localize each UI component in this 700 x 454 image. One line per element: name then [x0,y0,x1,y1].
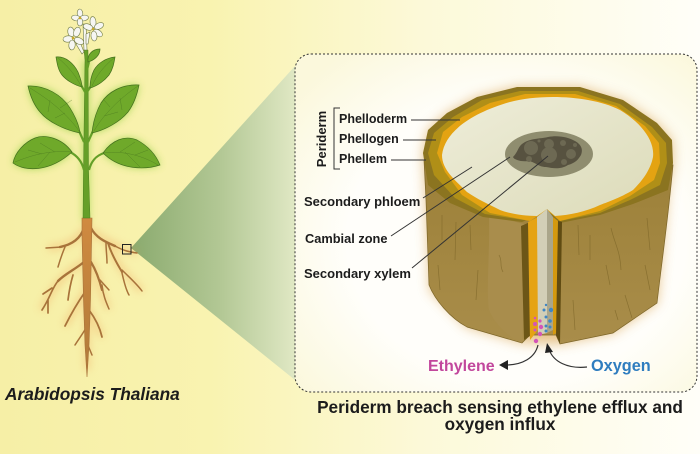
label: phellogen: Phellogen [339,132,399,146]
lateral roots [42,228,142,355]
bark body [424,160,673,344]
central core [505,131,593,177]
root glow [42,220,142,370]
ethylene dots [533,317,543,343]
section glow [423,87,673,344]
leaf veins [15,58,158,167]
label: secondary phloem [304,167,472,209]
left bark fold [488,215,528,343]
stem section [423,87,673,344]
leaf glow [13,60,160,220]
label: cambial zone: Cambial zone [305,231,388,246]
oxygen label: Oxygen [591,357,651,375]
stem [83,50,90,218]
label: secondary xylem [304,156,548,281]
label: phellogen [339,132,436,146]
periderm bracket [334,108,340,169]
label: phelloderm [339,112,460,126]
flowers [63,9,105,54]
arrow: oxygen in [545,343,587,367]
label: phellem [339,152,426,166]
label: secondary xylem: Secondary xylem [304,266,411,281]
caption line 2: oxygen influx [445,414,556,434]
top inner tissue [442,97,653,216]
periderm label: Periderm [314,111,329,167]
label: phellem: Phellem [339,152,387,166]
arrow: ethylene out [499,345,538,370]
zoom wedge [131,66,295,380]
breach walls [521,209,562,344]
top outer bark [423,87,673,223]
leaves [13,49,160,169]
taproot [82,218,92,377]
label: phelloderm: Phelloderm [339,112,407,126]
oxygen dots [542,304,553,332]
label: cambial zone [305,157,510,246]
petioles [70,62,104,170]
top gold layer [437,94,660,221]
label: secondary phloem: Secondary phloem [304,194,420,209]
top periderm mid layer [428,91,667,221]
detail panel [295,54,697,392]
species label: Arabidopsis Thaliana [4,384,180,404]
bark cracks [438,215,650,330]
ethylene label: Ethylene [428,358,495,375]
plant [13,9,160,377]
caption: Periderm breach sensing ethylene efflux and [317,397,683,417]
zoom square [122,244,131,254]
